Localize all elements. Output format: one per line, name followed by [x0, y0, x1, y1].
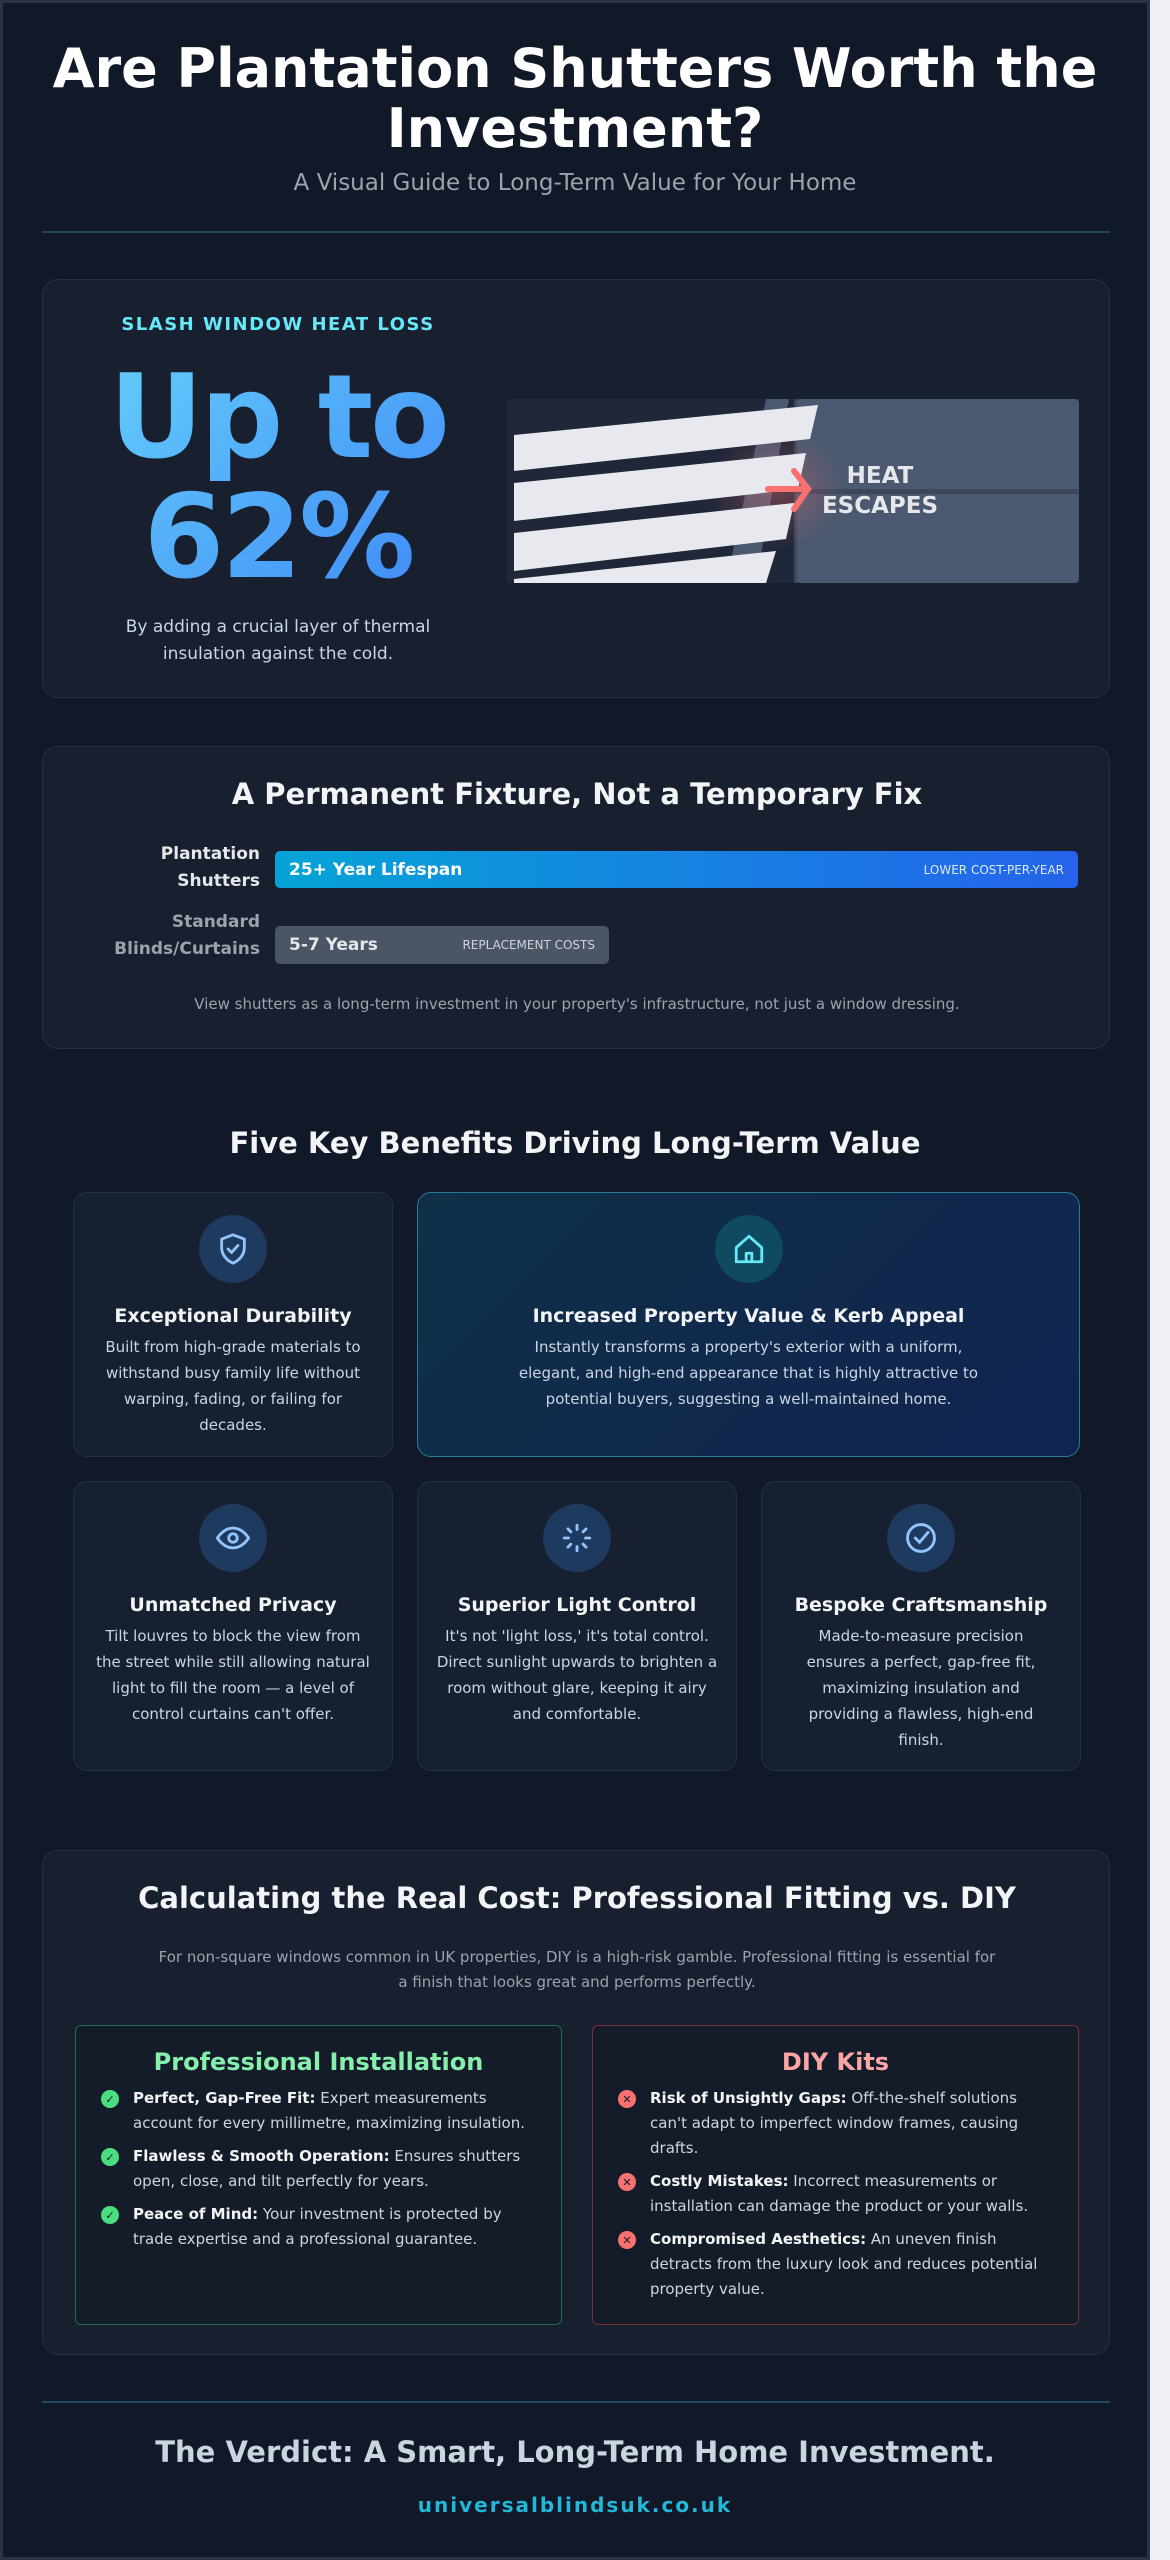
box: DIY: ✕	[622, 2176, 632, 2188]
card: property value	[417, 1192, 1080, 1457]
illustration: shutters heat escapes: HEAT	[847, 463, 914, 489]
bar: 25+ years: 25+ Year Lifespan	[289, 860, 462, 880]
icon: eye	[199, 1504, 267, 1572]
illustration: shutters heat escapes	[514, 399, 1079, 583]
card: durability: Built from high-grade materials to withstand busy family life without warping, fading, or failing for decades.	[105, 1338, 361, 1434]
icon: house	[714, 1215, 782, 1283]
heading: A Permanent Fixture, Not a Temporary Fix	[232, 777, 922, 811]
card: craftsmanship: Bespoke Craftsmanship	[795, 1594, 1047, 1616]
footnote: View shutters as a long-term investment in your property's infrastructure, not just a window dressing.	[194, 995, 960, 1013]
caption: By adding a crucial layer of thermal insulation against the cold.	[126, 617, 430, 664]
bar: 5-7 years: REPLACEMENT COSTS	[462, 938, 595, 952]
label: standard blinds	[114, 912, 260, 959]
box: DIY: DIY Kits	[782, 2048, 889, 2076]
bar: 5-7 years	[275, 926, 609, 964]
card: privacy	[73, 1481, 393, 1771]
box: professional: Peace of Mind: Your investment is protected by trade expertise and a professional guarantee.	[133, 2205, 502, 2248]
box: professional: Perfect, Gap-Free Fit: Expert measurements account for every millimetre, maximizing insulation.	[133, 2089, 525, 2132]
panel: permanent fixture	[42, 746, 1110, 1049]
box: professional: Professional Installation	[154, 2048, 483, 2076]
box: professional: Flawless & Smooth Operation: Ensures shutters open, close, and tilt perfectly for years.	[133, 2147, 520, 2190]
box: professional: ✓	[105, 2092, 115, 2106]
box: DIY: ✕	[622, 2092, 632, 2106]
label: standard blinds: Blinds/Curtains	[114, 939, 260, 959]
icon: shield	[199, 1215, 267, 1283]
big stat: 62%	[144, 470, 412, 605]
box: DIY: Risk of Unsightly Gaps: Off-the-shelf solutions can't adapt to imperfect window frames, causing drafts.	[650, 2089, 1018, 2157]
box: DIY: ✕	[622, 2234, 632, 2246]
card: light control	[417, 1481, 737, 1771]
panel: heat loss	[42, 279, 1110, 698]
title	[52, 37, 1097, 160]
panel: real cost	[42, 1850, 1110, 2355]
box: professional: ✓	[105, 2208, 115, 2222]
icon: check circle	[887, 1504, 955, 1572]
title: Investment?	[387, 97, 763, 160]
box: DIY: Compromised Aesthetics: An uneven finish detracts from the luxury look and reduces potential property value.	[650, 2230, 1037, 2298]
subtitle: A Visual Guide to Long-Term Value for Your Home	[294, 170, 856, 196]
label: plantation shutters: Plantation	[161, 844, 260, 864]
card: privacy: Tilt louvres to block the view from the street while still allowing natural light to fill the room — a level of control curtains can't offer.	[96, 1627, 370, 1723]
bar: 25+ years: LOWER COST-PER-YEAR	[924, 862, 1064, 876]
heading: Calculating the Real Cost: Professional Fitting vs. DIY	[138, 1881, 1016, 1915]
bar: 5-7 years: 5-7 Years	[289, 935, 378, 955]
box: DIY: Costly Mistakes: Incorrect measurements or installation can damage the product or your walls.	[650, 2172, 1028, 2215]
box: DIY	[592, 2025, 1079, 2325]
intro text: For non-square windows common in UK properties, DIY is a high-risk gamble. Professional fitting is essential for a finish that looks great and performs perfectly.	[159, 1948, 995, 1991]
heading: five benefits: Five Key Benefits Driving Long-Term Value	[230, 1126, 920, 1160]
box: professional	[75, 2025, 562, 2325]
card: durability	[73, 1192, 393, 1457]
title: Are Plantation Shutters Worth the	[53, 37, 1097, 100]
card: property value: Instantly transforms a property's exterior with a uniform, elegant, and high-end appearance that is highly attractive to potential buyers, suggesting a well-maintained home.	[519, 1338, 978, 1408]
card: craftsmanship	[761, 1481, 1081, 1771]
url: universalblindsuk.co.uk	[418, 2493, 732, 2517]
card: property value: Increased Property Value & Kerb Appeal	[533, 1305, 964, 1327]
label: slash heat loss: SLASH WINDOW HEAT LOSS	[121, 314, 435, 335]
box: professional: ✓	[105, 2150, 115, 2164]
card: light control: It's not 'light loss,' it's total control. Direct sunlight upwards to brighten a room without glare, keeping it airy and comfortable.	[437, 1627, 717, 1723]
icon: sun rays	[543, 1504, 611, 1572]
label: plantation shutters: Shutters	[177, 871, 260, 891]
big stat: Up to	[109, 350, 447, 485]
card: light control: Superior Light Control	[458, 1594, 696, 1616]
big stat	[43, 358, 513, 598]
label: standard blinds: Standard	[172, 912, 260, 932]
card: durability: Exceptional Durability	[114, 1305, 352, 1327]
verdict: The Verdict: A Smart, Long-Term Home Investment.	[155, 2435, 995, 2469]
card: privacy: Unmatched Privacy	[129, 1594, 337, 1616]
card: craftsmanship: Made-to-measure precision ensures a perfect, gap-free fit, maximizing insulation and providing a flawless, high-end finish.	[807, 1627, 1035, 1749]
illustration: shutters heat escapes: ESCAPES	[822, 493, 938, 519]
bar: 25+ years	[275, 851, 1078, 888]
label: plantation shutters	[161, 844, 260, 891]
